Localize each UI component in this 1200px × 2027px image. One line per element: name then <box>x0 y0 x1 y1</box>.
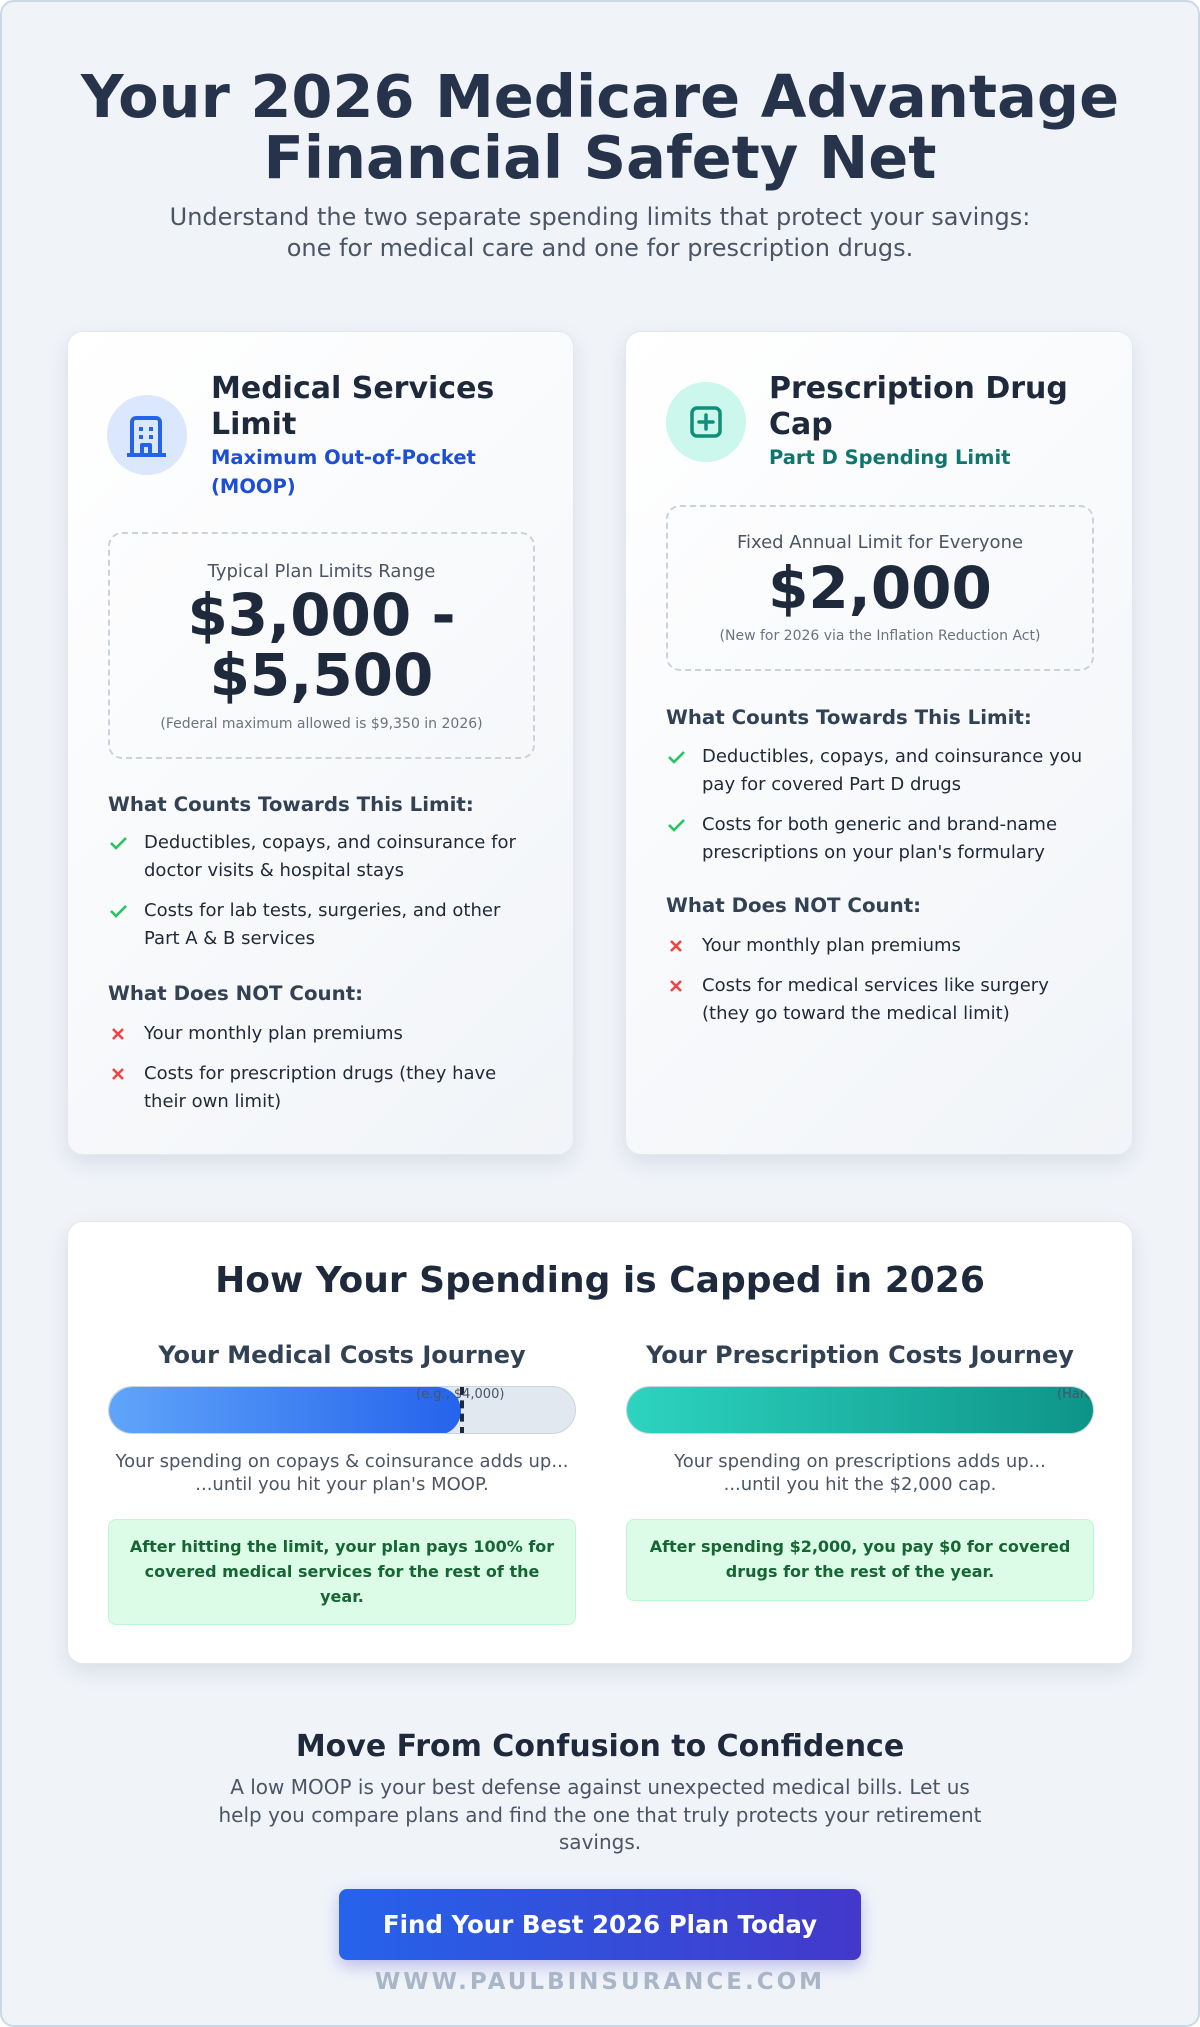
medical journey <box>108 1341 576 1625</box>
subtitle: one for medical care and one for prescription drugs. <box>287 234 913 262</box>
card heading: Medical Services <box>211 371 494 406</box>
closing text: A low MOOP is your best defense against unexpected medical bills. Let us help you compare plans and find the one that truly protects your retirement savings. <box>218 1775 981 1854</box>
cta button: Find Your Best 2026 Plan Today <box>383 1910 817 1939</box>
list: not counted: Your monthly plan premiums <box>144 1023 403 1044</box>
result callout: After spending $2,000, you pay $0 for covered drugs for the rest of the year. <box>650 1537 1070 1581</box>
icon: hospital building <box>107 395 187 475</box>
journey text: ...until you hit the $2,000 cap. <box>724 1474 996 1495</box>
list: counts: Costs for lab tests, surgeries, and other Part A & B services <box>144 900 500 949</box>
card heading <box>769 371 1068 442</box>
does not count heading: What Does NOT Count: <box>108 982 363 1005</box>
subtitle: Understand the two separate spending limits that protect your savings: <box>170 203 1030 231</box>
list: counts <box>668 746 1082 863</box>
title: Financial Safety Net <box>264 123 936 192</box>
list: not counted <box>112 1023 496 1112</box>
result callout <box>626 1519 1094 1601</box>
journey heading: Your Prescription Costs Journey <box>646 1341 1074 1369</box>
card heading: Cap <box>769 407 833 442</box>
card subheading: (MOOP) <box>211 475 296 498</box>
result callout <box>108 1519 576 1625</box>
fixed limit box: Fixed Annual Limit for Everyone <box>737 532 1023 553</box>
journey text: ...until you hit your plan's MOOP. <box>195 1474 489 1495</box>
what counts heading: What Counts Towards This Limit: <box>666 706 1032 729</box>
list: not counted: Costs for medical services like surgery (they go toward the medical limit) <box>702 975 1049 1024</box>
closing heading: Move From Confusion to Confidence <box>296 1729 904 1764</box>
journey text: Your spending on copays & coinsurance adds up... <box>115 1451 569 1472</box>
journey text: Your spending on prescriptions adds up... <box>674 1451 1046 1472</box>
list: not counted <box>670 935 1049 1024</box>
list: counts: Deductibles, copays, and coinsurance for doctor visits & hospital stays <box>144 832 516 881</box>
progress bar: (e.g., $4,000) <box>416 1387 504 1402</box>
prescription journey <box>626 1341 1094 1601</box>
journey text <box>115 1451 569 1495</box>
journey heading: Your Medical Costs Journey <box>158 1341 526 1369</box>
panel: prescription drug cap <box>625 331 1133 1155</box>
list: counts: Deductibles, copays, and coinsurance you pay for covered Part D drugs <box>702 746 1082 795</box>
journey text <box>674 1451 1046 1495</box>
title: Your 2026 Medicare Advantage <box>81 62 1119 131</box>
progress bar <box>108 1386 576 1434</box>
fixed limit box: (New for 2026 via the Inflation Reduction Act) <box>720 628 1040 644</box>
progress bar <box>626 1386 1094 1434</box>
icon: medical plus <box>666 382 746 462</box>
card heading: Prescription Drug <box>769 371 1068 406</box>
card heading <box>211 371 494 442</box>
result callout: After hitting the limit, your plan pays 100% for covered medical services for the rest of the year. <box>130 1537 554 1606</box>
card subheading <box>211 446 476 498</box>
limit range box <box>108 532 535 759</box>
limit range box: $5,500 <box>210 641 433 709</box>
title <box>80 62 1119 192</box>
panel: medical services limit <box>67 331 574 1155</box>
fixed limit box: $2,000 <box>768 554 992 622</box>
website url: WWW.PAULBINSURANCE.COM <box>375 1969 825 1995</box>
list: not counted: Costs for prescription drugs (they have their own limit) <box>144 1063 496 1112</box>
list: not counted: Your monthly plan premiums <box>702 935 961 956</box>
panel: spending capped <box>67 1221 1133 1664</box>
list: counts: Costs for both generic and brand-name prescriptions on your plan's formulary <box>702 814 1057 863</box>
limit range box: (Federal maximum allowed is $9,350 in 2026) <box>160 716 483 732</box>
fixed limit box <box>666 505 1094 671</box>
card subheading: Maximum Out-of-Pocket <box>211 446 476 469</box>
what counts heading: What Counts Towards This Limit: <box>108 793 474 816</box>
cta button <box>339 1889 861 1960</box>
limit range box: $3,000 - <box>187 581 456 649</box>
card heading: Limit <box>211 407 296 442</box>
card subheading: Part D Spending Limit <box>769 446 1010 469</box>
limit range box: Typical Plan Limits Range <box>208 561 435 582</box>
list: counts <box>110 832 516 949</box>
panel heading: How Your Spending is Capped in 2026 <box>215 1260 985 1301</box>
does not count heading: What Does NOT Count: <box>666 894 921 917</box>
subtitle <box>170 203 1030 262</box>
